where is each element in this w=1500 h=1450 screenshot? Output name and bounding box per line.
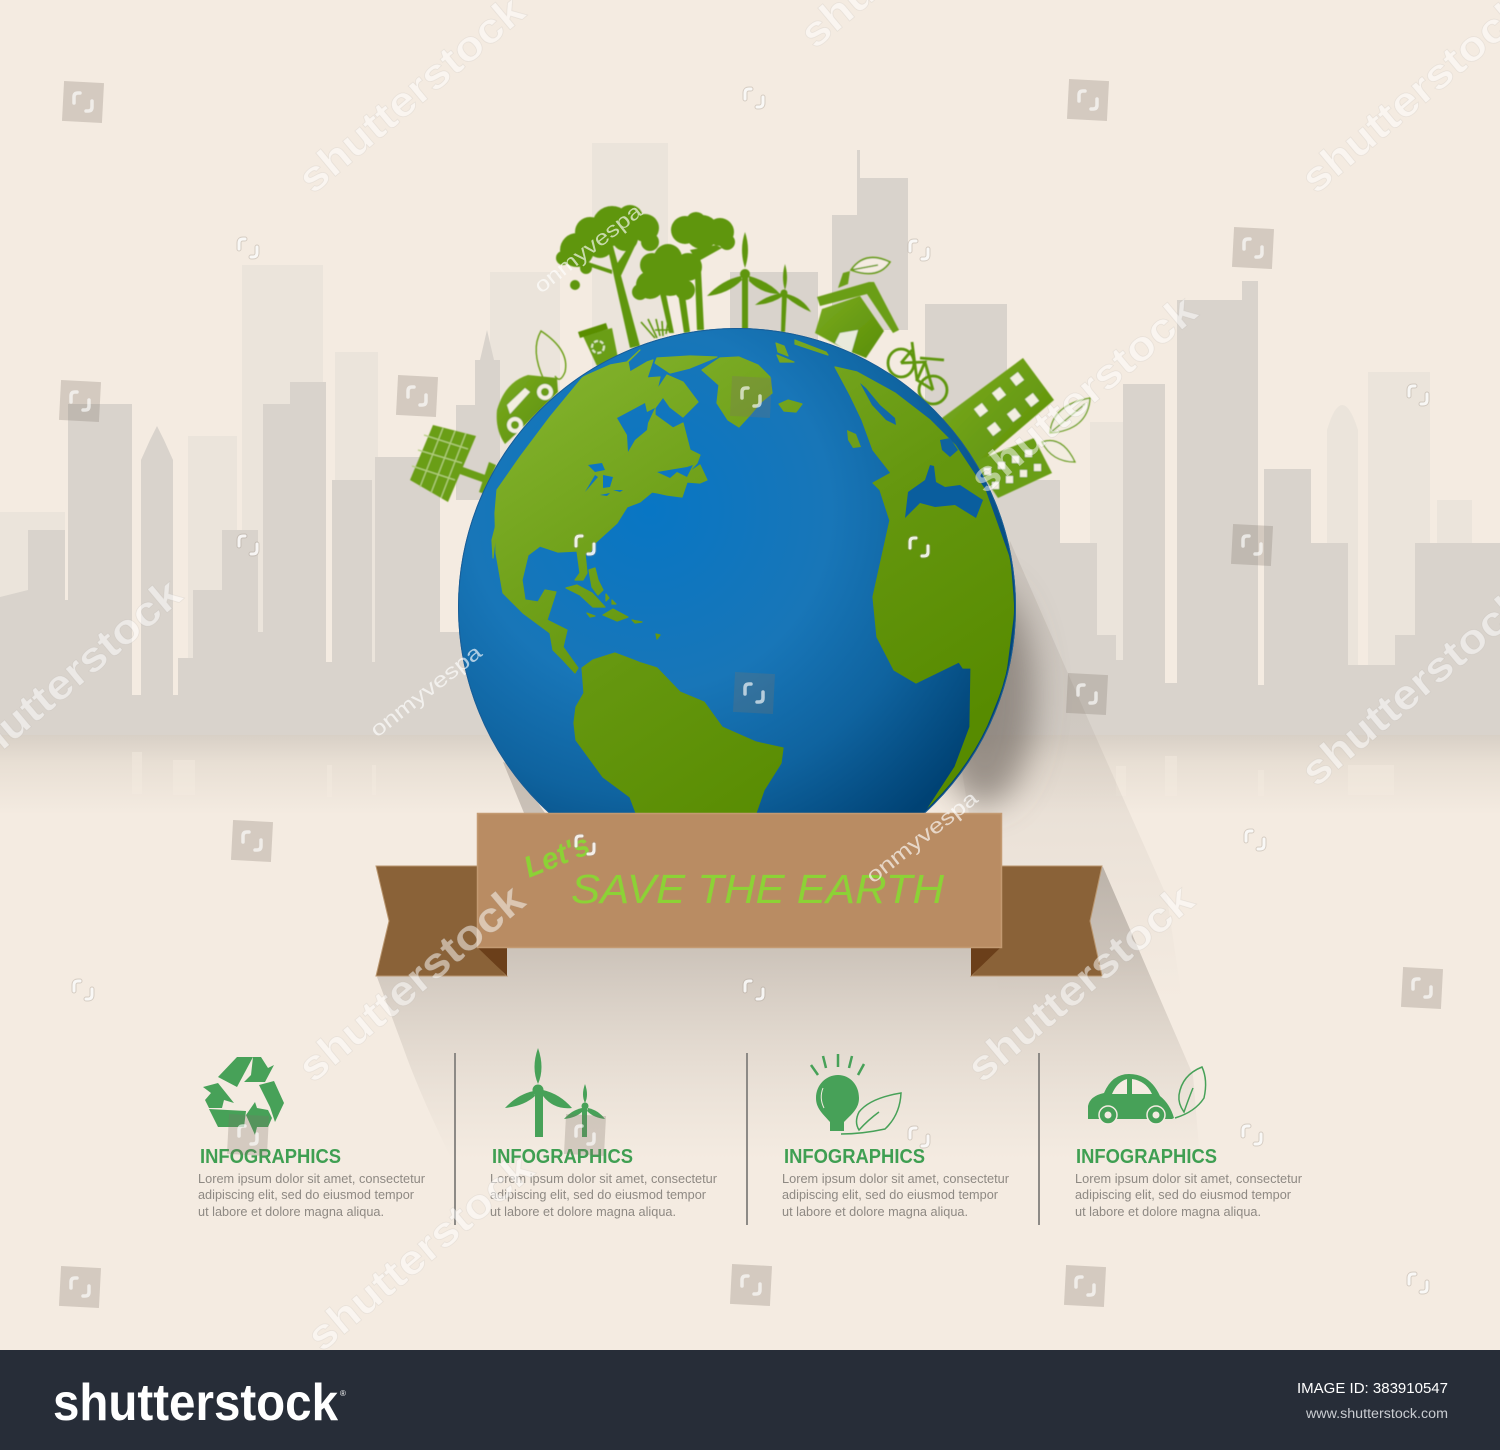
land: Iceland and specks bbox=[776, 340, 828, 412]
item body text: Lorem ipsum dolor sit amet, consectetur bbox=[490, 1172, 717, 1186]
banner long shadow bbox=[377, 867, 1200, 1160]
divider bbox=[746, 1053, 748, 1225]
watermark square badges bbox=[59, 79, 1443, 1308]
footer registered mark: ® bbox=[340, 1389, 346, 1398]
item body text: adipiscing elit, sed do eiusmod tempor bbox=[1075, 1188, 1291, 1202]
land: Britain and Italy bbox=[847, 430, 861, 448]
watermark wordmarks: shutterstock bbox=[289, 874, 534, 1091]
item body text: adipiscing elit, sed do eiusmod tempor bbox=[490, 1188, 706, 1202]
divider bbox=[454, 1053, 456, 1225]
banner front bbox=[478, 814, 1002, 948]
footer image id: IMAGE ID: 383910547 bbox=[1297, 1380, 1448, 1397]
left fold bbox=[477, 947, 507, 976]
globe rim highlight bbox=[458, 328, 1016, 813]
columns of infographic items bbox=[198, 1048, 1302, 1225]
item heading: INFOGRAPHICS bbox=[200, 1146, 341, 1168]
icon: eco house bbox=[815, 258, 899, 358]
column 2 bbox=[490, 1048, 717, 1219]
item body text bbox=[490, 1172, 717, 1219]
near dark buildings bbox=[0, 150, 1500, 735]
footer url: www.shutterstock.com bbox=[1305, 1406, 1448, 1421]
item body text: ut labore et dolore magna aliqua. bbox=[1075, 1205, 1261, 1219]
icon: leaf and eco car bbox=[497, 331, 566, 444]
item body text: ut labore et dolore magna aliqua. bbox=[490, 1205, 676, 1219]
land: Europe and Africa bbox=[835, 367, 1014, 816]
item body text: ut labore et dolore magna aliqua. bbox=[782, 1205, 968, 1219]
globe bbox=[458, 328, 1016, 813]
item heading: INFOGRAPHICS bbox=[492, 1146, 633, 1168]
watermark contributor names: onmyvespa bbox=[366, 640, 487, 742]
dark contact shadow beside globe bbox=[935, 585, 1035, 805]
sea: Baltic bbox=[860, 383, 896, 425]
watermark wordmarks: shutterstock bbox=[289, 0, 534, 202]
icon: light bulb and leaf bbox=[811, 1054, 901, 1134]
column 4 bbox=[1075, 1067, 1302, 1219]
item heading: INFOGRAPHICS bbox=[784, 1146, 925, 1168]
sea: Black Sea bbox=[940, 438, 958, 457]
floor with horizon shading bbox=[0, 735, 1500, 815]
icon: car and leaf bbox=[1088, 1067, 1206, 1124]
icon: forest trees bbox=[556, 205, 735, 348]
land: North America bbox=[495, 350, 707, 673]
land: Greenland bbox=[702, 357, 772, 427]
watermark wordmarks: shutterstock bbox=[958, 874, 1203, 1091]
item body text bbox=[782, 1172, 1009, 1219]
left tail bbox=[376, 866, 507, 976]
right fold bbox=[971, 947, 1001, 976]
sea: Great Lakes bbox=[585, 463, 623, 496]
watermark contributor names bbox=[366, 200, 983, 888]
icon: solar panel bbox=[410, 425, 496, 502]
icon: bicycle bbox=[888, 342, 947, 404]
globe ocean bbox=[458, 328, 1016, 813]
divider bbox=[1038, 1053, 1040, 1225]
land masses bbox=[492, 340, 1014, 816]
item heading: INFOGRAPHICS bbox=[1076, 1146, 1217, 1168]
item body text: ut labore et dolore magna aliqua. bbox=[198, 1205, 384, 1219]
column 3 bbox=[782, 1054, 1009, 1219]
item body text bbox=[1075, 1172, 1302, 1219]
land: South America bbox=[574, 653, 783, 813]
item body text: Lorem ipsum dolor sit amet, consectetur bbox=[782, 1172, 1009, 1186]
column 1 bbox=[198, 1057, 425, 1219]
left contact shadow bbox=[503, 762, 545, 813]
item body text: adipiscing elit, sed do eiusmod tempor bbox=[198, 1188, 414, 1202]
item body text: Lorem ipsum dolor sit amet, consectetur bbox=[198, 1172, 425, 1186]
icon: low building with leaves bbox=[974, 398, 1090, 498]
globe long shadow bbox=[960, 541, 1193, 1075]
icon: wind turbines bbox=[505, 1048, 605, 1137]
land: Arctic islands bbox=[654, 355, 718, 374]
sea: Gulf of St Lawrence bbox=[657, 465, 693, 478]
footer logo: shutterstock bbox=[53, 1374, 338, 1432]
long shadow of globe and banner bbox=[377, 541, 1200, 1160]
watermark wordmarks: shutterstock bbox=[298, 1143, 543, 1360]
icon: small plant bbox=[641, 319, 670, 338]
watermark contributor names: onmyvespa bbox=[862, 786, 983, 888]
right tail bbox=[971, 866, 1102, 976]
background city skyline bbox=[0, 143, 1500, 735]
footer bar bbox=[0, 1350, 1500, 1450]
land: Caribbean islands bbox=[566, 568, 660, 639]
item body text: Lorem ipsum dolor sit amet, consectetur bbox=[1075, 1172, 1302, 1186]
eco icons standing on top of the globe bbox=[410, 205, 1090, 502]
inland seas bbox=[585, 383, 983, 518]
icon: office building bbox=[942, 358, 1054, 482]
banner ribbon bbox=[376, 814, 1102, 976]
banner heading Let's: Let's bbox=[519, 828, 595, 884]
watermark contributor names: onmyvespa bbox=[530, 200, 647, 298]
sea: Hudson Bay bbox=[617, 403, 655, 452]
icon: recycle bbox=[203, 1057, 284, 1135]
watermark small glyphs bbox=[74, 89, 1427, 1292]
watermark wordmarks: shutterstock bbox=[961, 285, 1206, 502]
icon: turbines bbox=[707, 232, 811, 332]
land: Alaska sliver bbox=[491, 526, 496, 559]
item body text bbox=[198, 1172, 425, 1219]
sea: Mediterranean bbox=[905, 465, 983, 518]
item body text: adipiscing elit, sed do eiusmod tempor bbox=[782, 1188, 998, 1202]
banner title: SAVE THE EARTH bbox=[571, 866, 944, 912]
icon: recycling bin bbox=[578, 323, 618, 366]
far light buildings bbox=[0, 143, 1472, 735]
